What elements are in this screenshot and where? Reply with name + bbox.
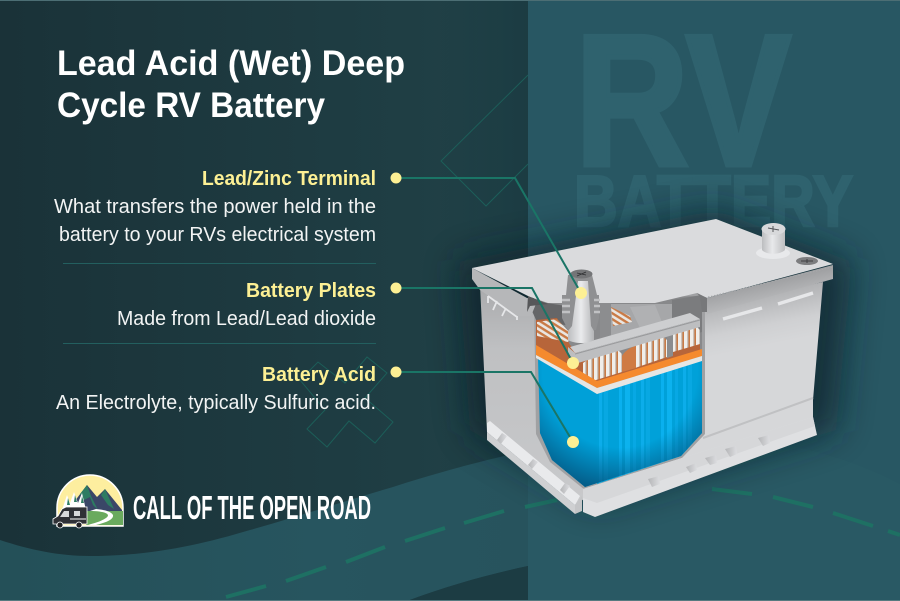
callout text: Battery Acid: Battery Acid [262, 364, 376, 386]
road centre dashes [226, 489, 900, 597]
lead terminal cutaway [562, 270, 600, 343]
callout text: Lead/Zinc Terminal: Lead/Zinc Terminal [202, 168, 376, 190]
title: Lead Acid (Wet) Deep [57, 44, 405, 83]
connector strap [568, 313, 700, 363]
leader line: terminal [390, 172, 587, 299]
cutaway interior [527, 292, 705, 490]
battery lid [472, 219, 833, 316]
leader line: plates [390, 282, 579, 369]
callout text: Lead/Zinc Terminal [54, 168, 376, 246]
title: Cycle RV Battery [57, 86, 326, 125]
callout text: Battery Acid [56, 364, 376, 414]
battery illustration [472, 219, 833, 517]
logo: Call of the Open Road [53, 475, 371, 528]
battery casing: right face [585, 282, 823, 492]
callout text: Lead/Zinc Terminal: What transfers the power held in the [54, 196, 376, 218]
decorative watermark: RV BATTERY: RV [575, 0, 791, 205]
callout text: Lead/Zinc Terminal: battery to your RVs electrical system [59, 224, 376, 246]
battery casing: left face [480, 285, 590, 505]
battery shadow [458, 210, 852, 505]
callout text: Battery Acid: An Electrolyte, typically Sulfuric acid. [56, 392, 376, 414]
acid: blue electrolyte [538, 358, 702, 487]
casing label tabs [488, 293, 813, 320]
vent screw [796, 257, 818, 265]
decorative watermark: RV BATTERY: BATTERY [574, 162, 853, 242]
right terminal post [756, 223, 790, 259]
callout text: Battery Plates: Made from Lead/Lead dioxide [117, 308, 376, 330]
callout text: Battery Plates: Battery Plates [246, 280, 376, 302]
battery plates [536, 307, 702, 394]
leader line: acid [390, 366, 579, 448]
logo wordmark: CALL OF THE OPEN ROAD [133, 489, 371, 526]
callout text: Battery Plates [117, 280, 376, 330]
logo emblem [53, 475, 123, 528]
battery plinth [487, 417, 817, 517]
title [57, 44, 405, 125]
